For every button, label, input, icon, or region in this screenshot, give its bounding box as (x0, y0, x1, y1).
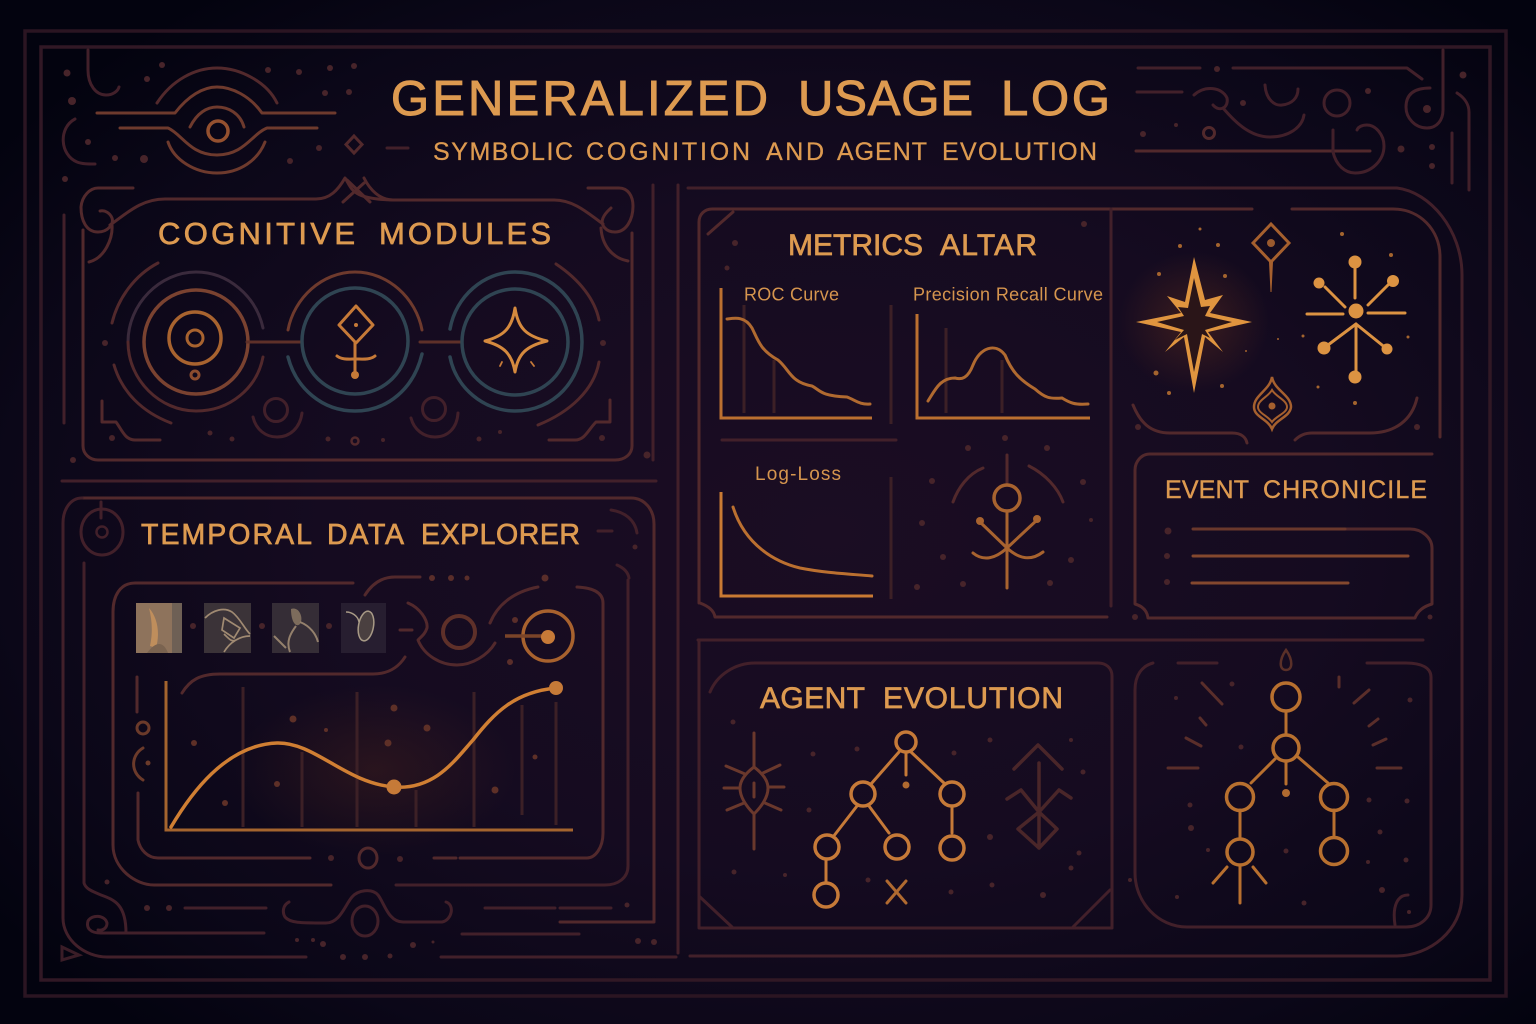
icon: target module (112, 263, 263, 423)
panel: temporal data explorer (62, 498, 676, 960)
thumbnails (136, 603, 386, 653)
icon: eye sun rune (724, 733, 784, 849)
icon: radial node burst (1307, 256, 1405, 384)
panel divider: center (676, 185, 680, 953)
chart: precision recall curve (913, 284, 1103, 418)
rays: lineage (1168, 677, 1401, 768)
ornament: symbols bottom brackets (1133, 398, 1420, 443)
icon: eight-pointed star (1136, 257, 1252, 393)
heading: event chronicle: EVENT (1165, 476, 1249, 504)
divider (698, 638, 1423, 642)
panel frame: cognitive modules (64, 178, 653, 460)
panel: cognitive modules (64, 178, 653, 463)
ornament: left of chart (134, 677, 150, 780)
heading: temporal data explorer: TEMPORAL (141, 519, 312, 551)
chart curve (171, 688, 556, 827)
icon: diamond pendant (1253, 224, 1289, 292)
ornament: eye top left (62, 50, 408, 232)
panel frame: chronicle (690, 454, 1462, 956)
tree diagram: agent (814, 732, 964, 907)
star field dots (1154, 228, 1410, 405)
panel frame: evolution tree (1135, 663, 1431, 927)
line chart: temporal (166, 681, 573, 855)
heading: cognitive modules: MODULES (379, 216, 551, 251)
ornament: lower modules (70, 340, 650, 463)
scatter dots: lineage (1128, 682, 1412, 914)
subtitle: AGENT (837, 138, 927, 166)
scatter dots (191, 704, 538, 806)
ornament: timeline eye (182, 574, 573, 693)
icon: diamond rune (1007, 745, 1071, 848)
heading: cognitive modules: COGNITIVE (158, 216, 355, 251)
tree diagram: lineage (1213, 650, 1348, 903)
panel frame: agent evolution (699, 641, 1112, 928)
title: GENERALIZED (391, 72, 768, 126)
panel frame: metrics (688, 188, 1462, 617)
thumbnail 2 (204, 603, 251, 653)
panel: evolution tree (1128, 650, 1431, 927)
chart axes (166, 681, 573, 830)
icon: star module (450, 264, 599, 425)
chart: ROC curve: ROC Curve (744, 284, 839, 304)
icon: flame eye (1254, 377, 1291, 429)
divider (62, 480, 656, 482)
icon: rune module (288, 272, 422, 411)
chart: log-loss (721, 464, 891, 599)
chart: log-loss: Log-Loss (755, 464, 841, 485)
heading: temporal data explorer: EXPLORER (421, 519, 580, 551)
panel: symbols (1119, 209, 1440, 443)
chart: ROC curve (721, 284, 891, 424)
ornament: top right (1136, 50, 1469, 190)
subtitle: EVOLUTION (942, 138, 1097, 166)
heading: temporal data explorer: DATA (327, 519, 404, 551)
subtitle: COGNITION (586, 138, 750, 166)
icon: anchor rune (724, 221, 1093, 590)
chart: precision recall curve: Precision Recall Curve (913, 284, 1103, 304)
grid lines (243, 687, 556, 827)
thumbnail 4 (341, 603, 386, 653)
heading: agent evolution: AGENT (760, 682, 865, 715)
panel: metrics altar (688, 188, 1462, 617)
heading: metrics altar: METRICS (788, 229, 923, 262)
event lines (1192, 529, 1408, 583)
subtitle: AND (766, 138, 824, 166)
scatter dots: agent (730, 720, 1086, 898)
thumbnail 1 (136, 603, 182, 653)
title: LOG (1001, 72, 1110, 126)
connector (247, 340, 302, 344)
panel frame: temporal explorer (62, 498, 676, 960)
heading: event chronicle: CHRONICILE (1263, 476, 1427, 504)
panel: agent evolution (699, 641, 1112, 928)
heading: agent evolution: EVOLUTION (883, 682, 1063, 715)
connector (420, 340, 462, 344)
subtitle: SYMBOLIC (433, 138, 573, 166)
heading: metrics altar: ALTAR (940, 229, 1037, 262)
thumbnail 3 (272, 603, 319, 653)
chart markers (386, 681, 563, 794)
panel: event chronicle (690, 454, 1462, 956)
title: USAGE (798, 72, 973, 126)
